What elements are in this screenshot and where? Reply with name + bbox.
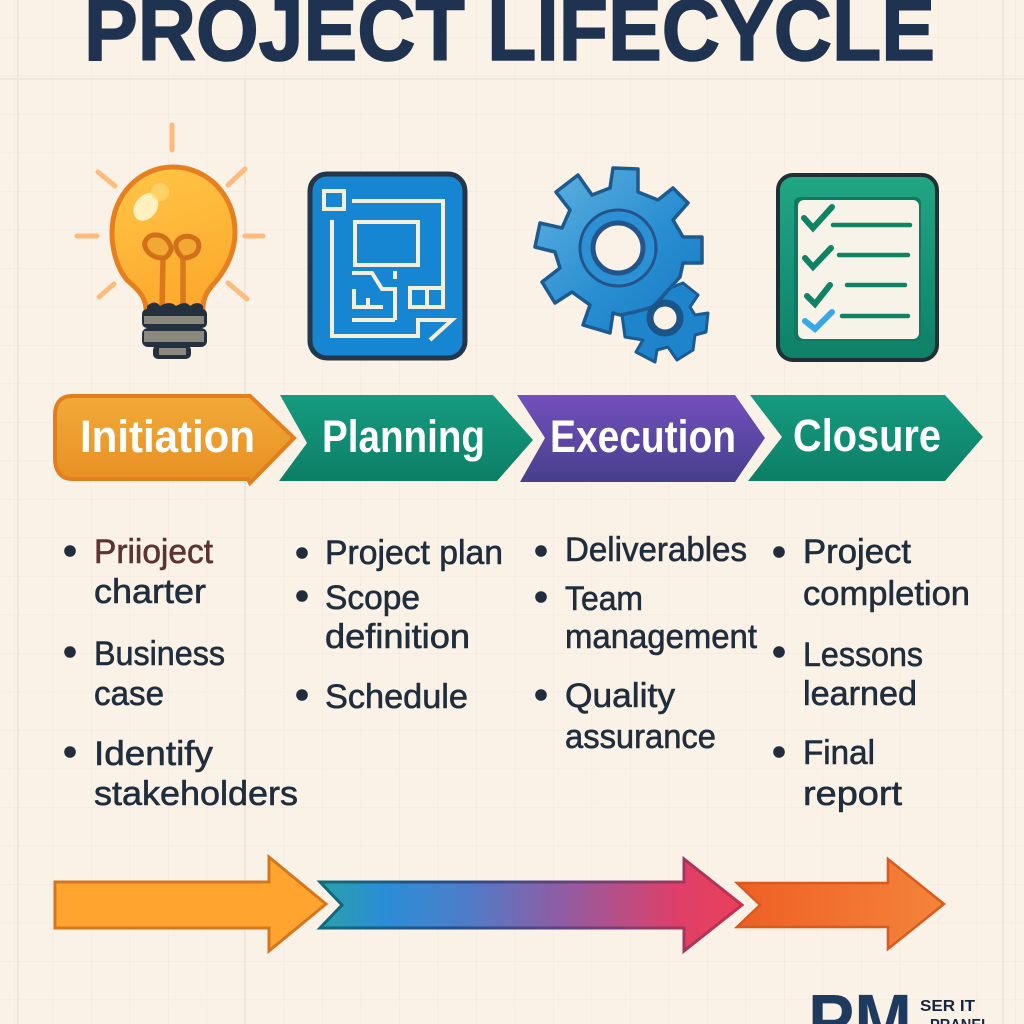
list: Closure items: Lessons (803, 636, 923, 674)
list: Initiation items: Identify (94, 735, 213, 773)
list: Closure items: report (803, 775, 903, 813)
list: Execution items: assurance (565, 718, 716, 756)
list: Execution items: management (565, 618, 758, 656)
list: Planning items: Project plan (325, 534, 503, 572)
arrow: orange (55, 857, 326, 951)
list: Initiation items: stakeholders (94, 775, 298, 813)
arrow: blue to red gradient (320, 859, 742, 951)
icon: checklist (778, 175, 937, 360)
list: Planning items: Schedule (325, 678, 468, 716)
phase chevron: Closure (748, 395, 983, 481)
phase chevron: Execution (517, 395, 765, 482)
logo (808, 979, 990, 1024)
phase chevron: Execution: Execution (550, 411, 736, 462)
phase chevron: Planning: Planning (322, 411, 485, 462)
list: Execution items: Team (565, 580, 643, 618)
list: Closure items: Final (803, 734, 875, 772)
list: Closure items: learned (803, 675, 917, 713)
phase chevron: Initiation: Initiation (80, 411, 255, 462)
logo: SER IT (920, 998, 975, 1015)
list: Execution items (536, 531, 758, 756)
icon: gears (535, 168, 708, 362)
list: Closure items: completion (803, 575, 970, 613)
list: Initiation items: case (94, 675, 164, 713)
phase chevron: Closure: Closure (793, 410, 941, 461)
list: Initiation items: Priioject (94, 533, 214, 571)
list: Initiation items (64, 533, 298, 813)
phase chevron: Initiation (55, 396, 294, 483)
list: Planning items: definition (325, 618, 470, 656)
list: Planning items: Scope (325, 579, 420, 617)
list: Execution items: Quality (565, 677, 675, 715)
arrow: orange-red (737, 859, 944, 949)
list: Execution items: Deliverables (565, 531, 747, 569)
icon: light bulb (77, 125, 263, 359)
list: Planning items (296, 534, 503, 716)
list: Initiation items: Business (94, 635, 225, 673)
icon: blueprint (310, 174, 465, 358)
list: Closure items (774, 533, 970, 813)
phase chevron: Planning (279, 395, 533, 481)
list: Initiation items: charter (94, 573, 206, 611)
list: Closure items: Project (803, 533, 912, 571)
